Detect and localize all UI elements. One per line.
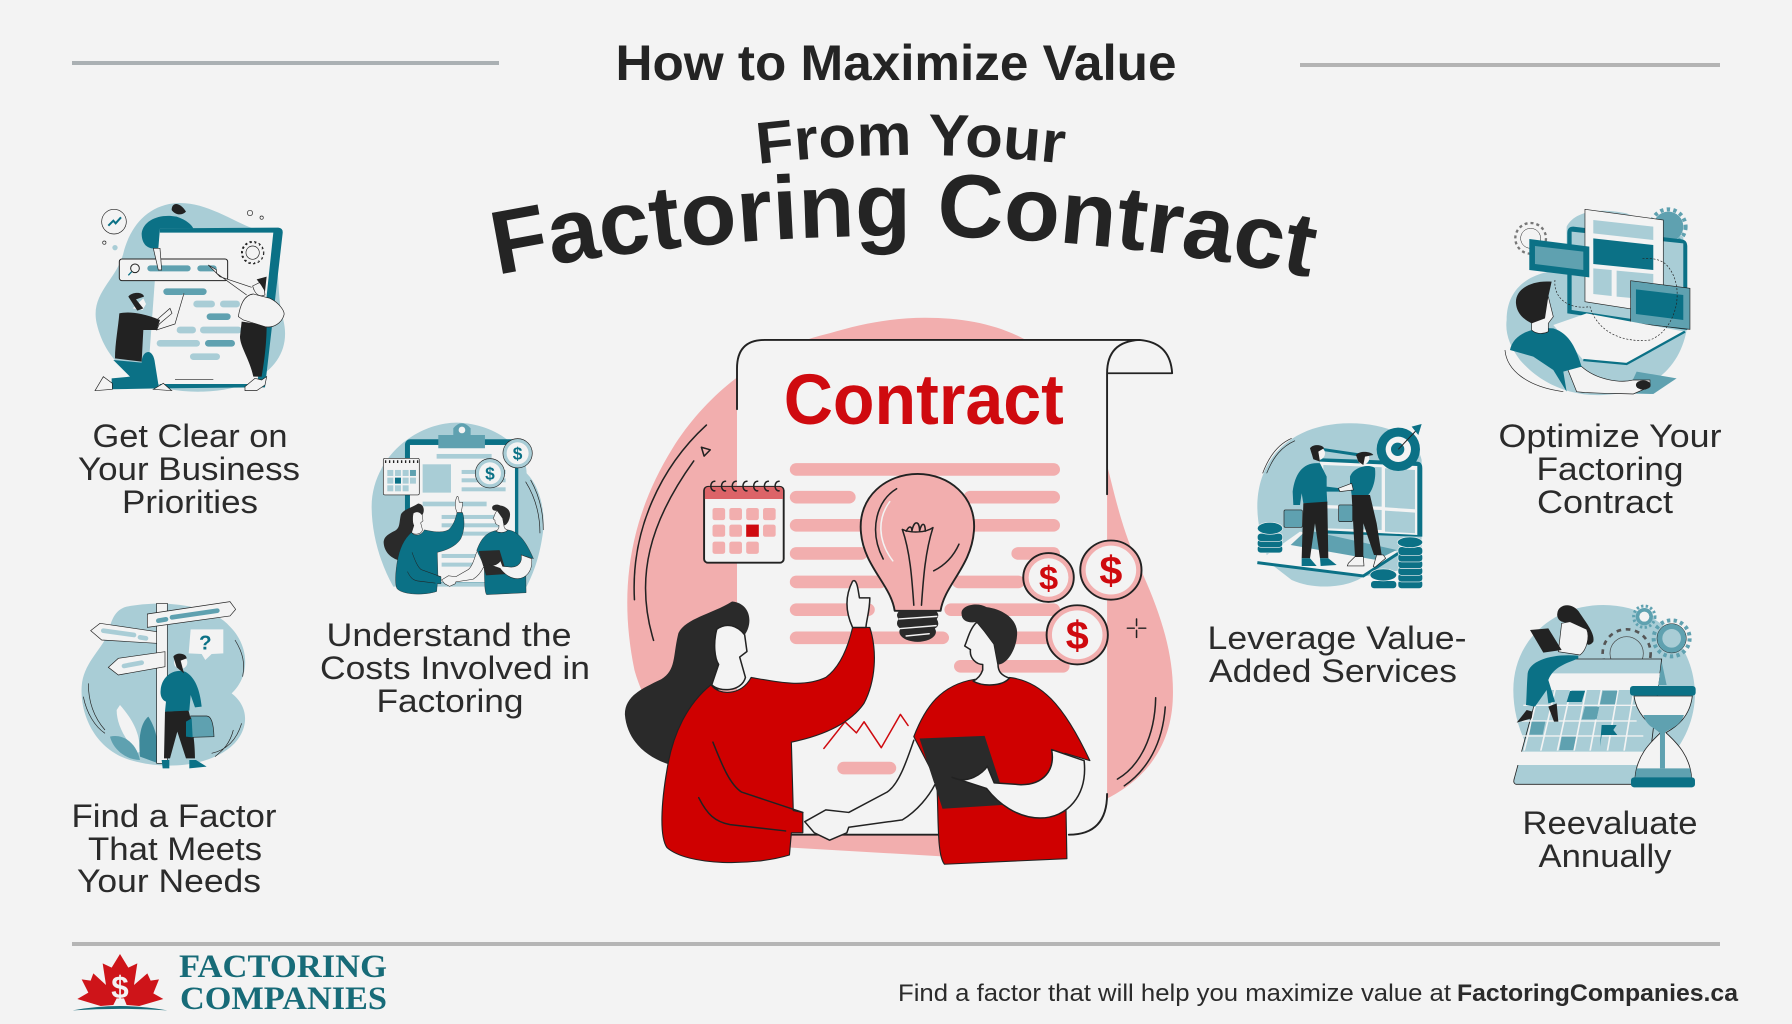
label: Costs Involved in (320, 650, 590, 686)
top right rule (1300, 63, 1720, 67)
illustration: clipboard with people (372, 423, 544, 595)
icon: calendar (704, 481, 784, 563)
label (78, 418, 300, 520)
item 4: Optimize Your Factoring Contract (1498, 209, 1722, 520)
item 6: Reevaluate Annually (1513, 605, 1698, 874)
icon: dollar coins (1023, 540, 1142, 664)
logo wordmark: FACTORING (179, 949, 387, 985)
illustration: man at signpost: ? (199, 631, 212, 654)
people shaking hands (625, 581, 1090, 864)
label (72, 798, 277, 899)
label (1208, 620, 1466, 689)
item 2: Understand the Costs Involved in Factoring (320, 423, 590, 719)
footer call to action (898, 980, 1738, 1007)
label: Optimize Your (1498, 418, 1722, 454)
logo wordmark (179, 949, 387, 1017)
label: Reevaluate (1522, 805, 1698, 841)
icon: dollar coins: $ (1066, 613, 1089, 658)
label: Find a Factor (72, 798, 277, 834)
illustration: man at signpost (82, 602, 245, 768)
footer call to action: Find a factor that will help you maximize value at (898, 980, 1451, 1007)
label: Factoring (376, 683, 524, 719)
document text lines (790, 463, 1070, 774)
pink blob background (627, 318, 1173, 859)
label (1522, 805, 1698, 874)
label: That Meets (88, 831, 262, 867)
decorative motion arcs (634, 425, 1165, 786)
title: From Your (758, 114, 1066, 164)
illustration: team with search interface (95, 203, 285, 392)
logo wordmark: COMPANIES (180, 981, 387, 1017)
label: Added Services (1209, 653, 1457, 689)
illustration: handshake with target and coins (1257, 423, 1423, 589)
label: Contract (1537, 484, 1673, 520)
footer rule (72, 942, 1720, 946)
label (1498, 418, 1722, 520)
title: Factoring Contract (492, 174, 1317, 276)
label: Your Business (78, 451, 300, 487)
contract paper (737, 340, 1172, 835)
illustration: calendar and hourglass (1513, 605, 1696, 787)
illustration: clipboard with people: $ (485, 463, 495, 483)
footer call to action: FactoringCompanies.ca (1457, 980, 1738, 1007)
title (492, 35, 1317, 276)
title: How to Maximize Value (616, 35, 1176, 91)
icon: maple leaf: $ (111, 970, 129, 1005)
illustration: clipboard with people: $ (513, 443, 523, 463)
icon: dollar coins: $ (1099, 548, 1123, 593)
item 3: Find a Factor That Meets Your Needs (72, 602, 277, 899)
heading: Contract: Contract (784, 361, 1064, 440)
label: Priorities (122, 484, 258, 520)
icon: light bulb (861, 474, 974, 642)
icon: maple leaf (73, 954, 167, 1010)
chart squiggle (824, 714, 908, 748)
label: Leverage Value- (1208, 620, 1466, 656)
label: Annually (1538, 838, 1672, 874)
item 1: Get Clear on Your Business Priorities (78, 203, 300, 520)
label: Get Clear on (92, 418, 288, 454)
label: Factoring (1536, 451, 1684, 487)
label: Understand the (326, 617, 572, 653)
central illustration: contract (625, 318, 1173, 864)
illustration: person at computer (1505, 209, 1690, 395)
label: Your Needs (77, 863, 261, 899)
top left rule (72, 61, 499, 65)
item 5: Leverage Value-Added Services (1208, 423, 1466, 689)
label (320, 617, 590, 719)
logo: Factoring Companies (73, 949, 387, 1017)
icon: dollar coins: $ (1039, 560, 1058, 597)
